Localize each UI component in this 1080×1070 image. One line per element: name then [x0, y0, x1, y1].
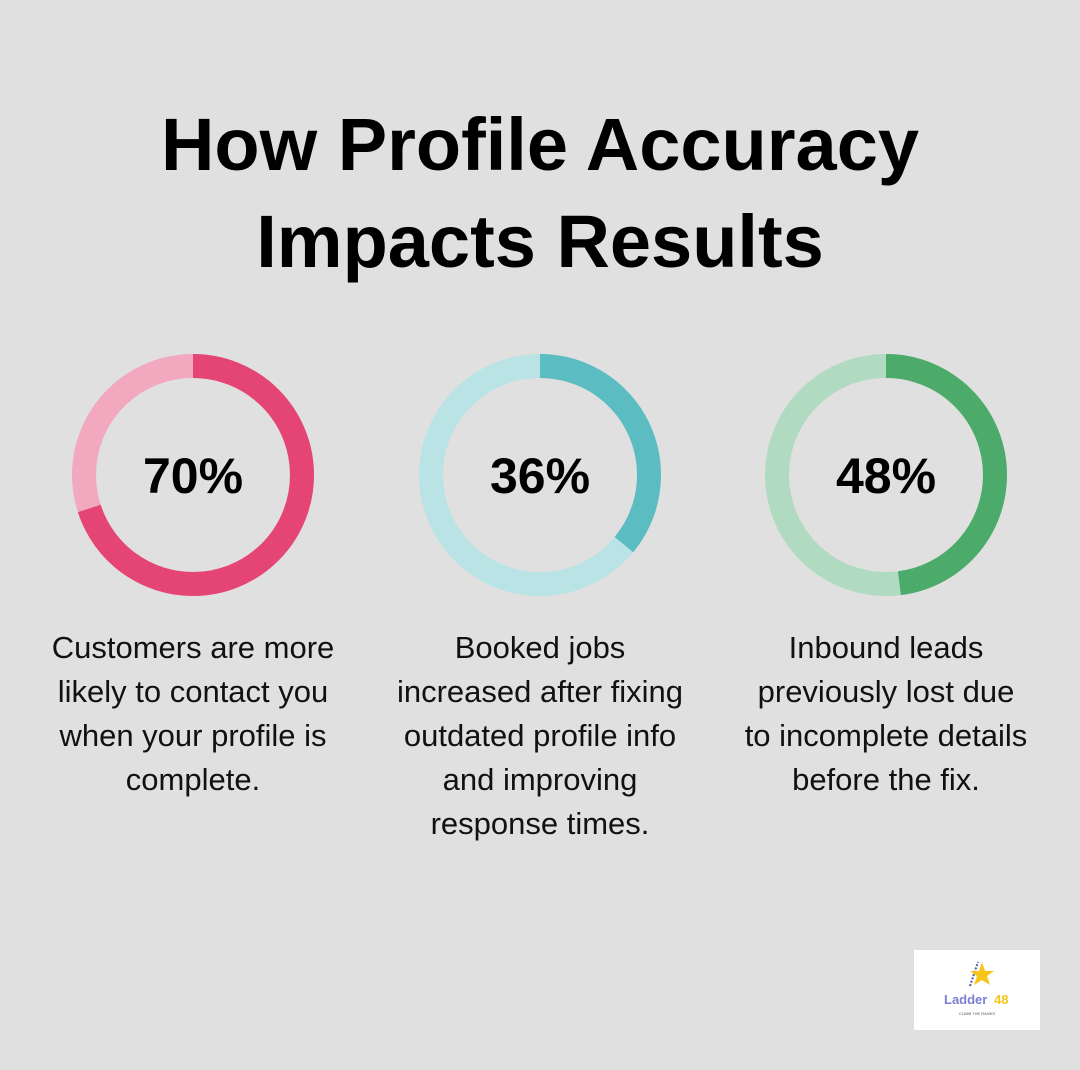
text: 36% description: outdated profile info — [404, 718, 676, 753]
text: 48% description: to incomplete details — [745, 718, 1027, 753]
text: 36% description: increased after fixing — [397, 674, 683, 709]
ring: 70%: 70% — [143, 448, 243, 504]
text: 36% description: response times. — [431, 806, 649, 841]
logo — [914, 950, 1040, 1030]
text: 70% description: likely to contact you — [58, 674, 328, 709]
ring: 36%: 36% — [490, 448, 590, 504]
title — [161, 103, 919, 283]
text: 48% description: Inbound leads — [789, 630, 983, 665]
logo: CLIMB THE RANKS — [959, 1011, 995, 1016]
text: 48% description: before the fix. — [792, 762, 980, 797]
ring: 48% — [765, 354, 1007, 596]
ring: 48%: 48% — [836, 448, 936, 504]
text: 36% description: Booked jobs — [455, 630, 625, 665]
logo: 48 — [994, 992, 1008, 1007]
text: 36% description — [397, 630, 683, 841]
logo: Ladder — [944, 992, 987, 1007]
ring: 36% — [419, 354, 661, 596]
text: 70% description: when your profile is — [59, 718, 327, 753]
title: Impacts Results — [256, 200, 824, 283]
title: How Profile Accuracy — [161, 103, 919, 186]
ring: 70% — [72, 354, 314, 596]
text: 70% description: Customers are more — [52, 630, 334, 665]
text: 70% description — [52, 630, 334, 797]
text: 70% description: complete. — [126, 762, 260, 797]
text: 48% description — [745, 630, 1027, 797]
text: 48% description: previously lost due — [758, 674, 1014, 709]
text: 36% description: and improving — [443, 762, 637, 797]
